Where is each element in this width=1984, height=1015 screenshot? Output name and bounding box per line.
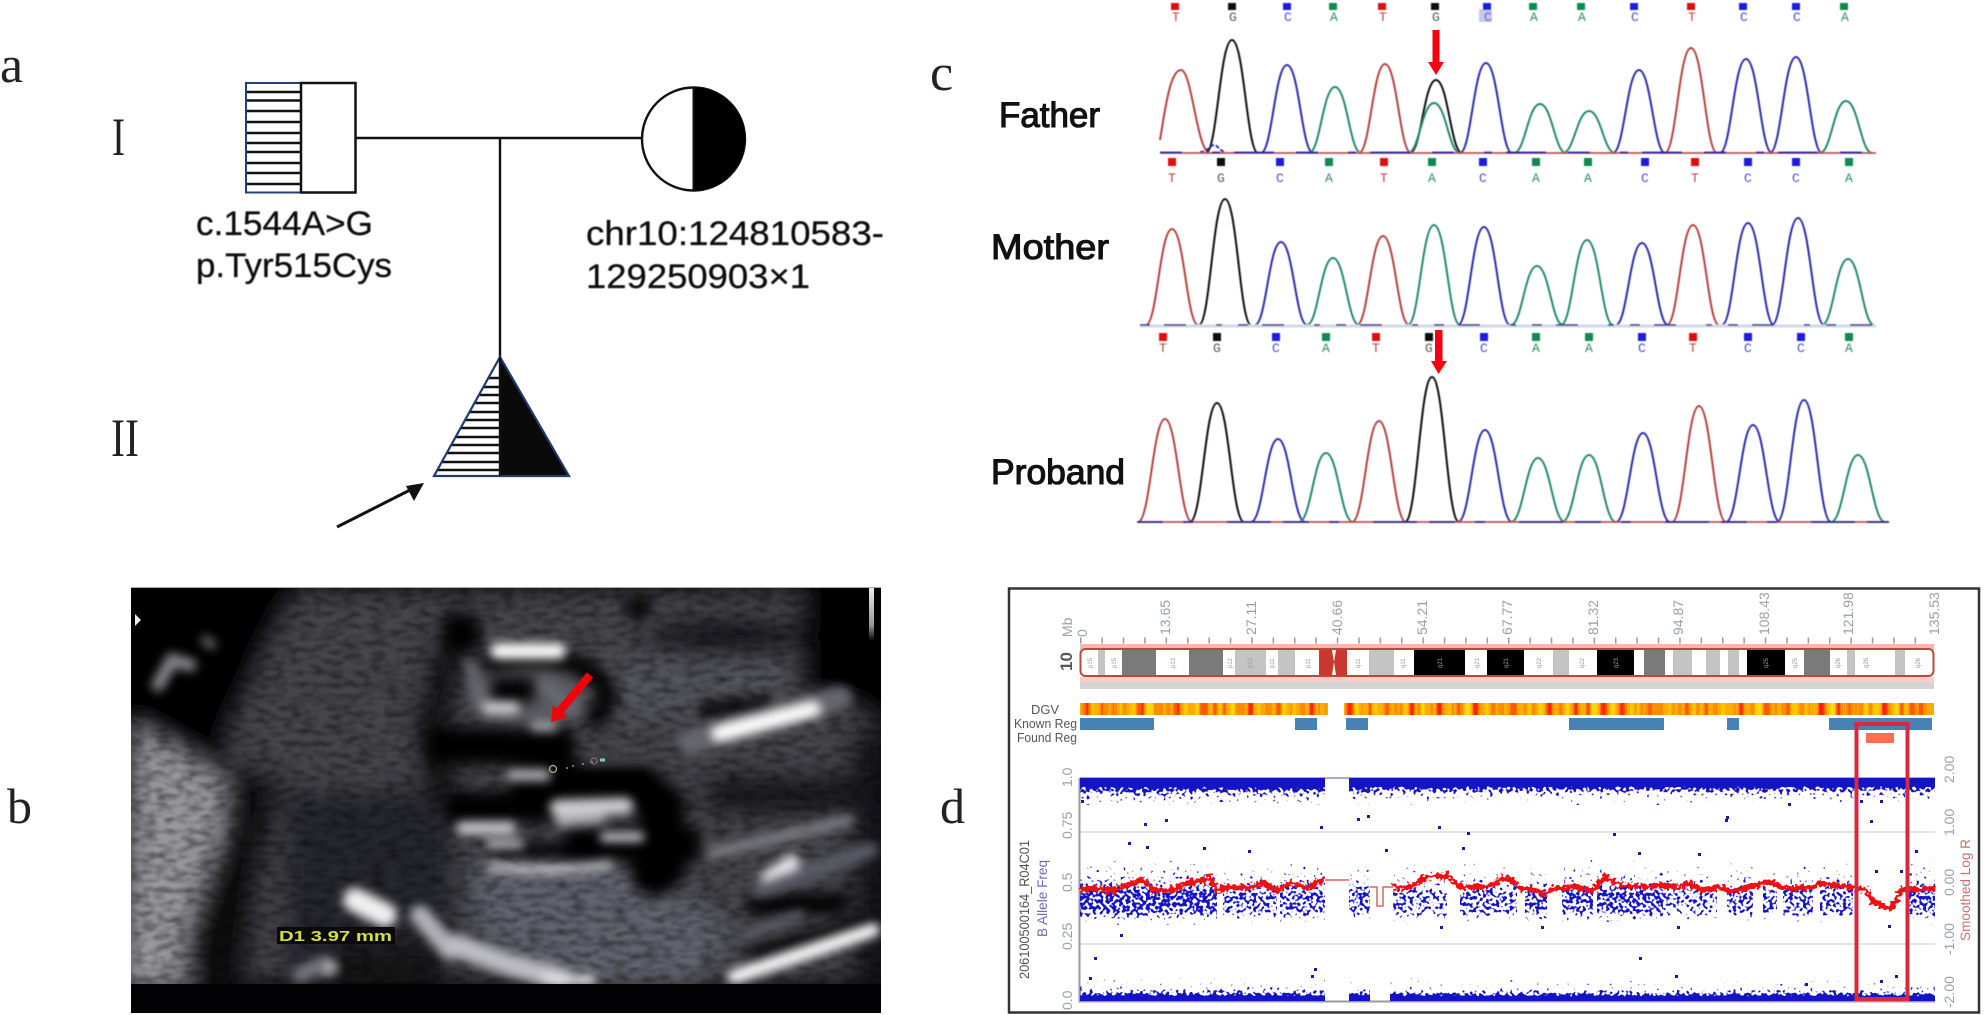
chromosome axis labels: Mb <box>1059 617 1075 637</box>
chromosome 10 ideogram: q26 <box>1864 657 1870 668</box>
Log R axis labels: -1.00 <box>1941 923 1957 955</box>
chromosome 10 ideogram: q21 <box>1438 657 1444 668</box>
BAF axis labels: 1.0 <box>1059 767 1075 787</box>
panel: ultrasound image <box>120 575 895 1013</box>
father variant label: p.Tyr515Cys <box>196 247 392 285</box>
base calls: father top row: TTT <box>1172 10 1696 25</box>
chromosome axis labels: 67.77 <box>1499 600 1515 635</box>
chromosome axis labels: 81.32 <box>1585 600 1601 635</box>
chromosome 10 ideogram: q26 <box>1836 657 1842 668</box>
Log R axis labels: -2.00 <box>1941 976 1957 1008</box>
chromosome 10 ideogram: p13 <box>1171 657 1177 668</box>
smoothed log R line <box>1080 875 1935 909</box>
panel label c: c <box>930 45 953 102</box>
chromosome axis labels: 108.43 <box>1756 592 1772 635</box>
chromosome 10 ideogram: p15 <box>1088 657 1094 668</box>
red arrow on ultrasound <box>551 675 590 722</box>
B allele frequency: middle band <box>1080 855 1935 925</box>
chromosome 10 ideogram: p12 <box>1228 657 1234 668</box>
chromosome axis labels: 13.65 <box>1157 600 1173 635</box>
chromosome 10 ideogram: q22 <box>1580 657 1586 668</box>
panel: sanger chromatograms <box>991 3 1889 522</box>
mother deletion label: chr10:124810583- <box>586 215 884 253</box>
ultrasound tissue background <box>120 575 895 990</box>
generation label II: II <box>111 408 139 468</box>
B allele frequency: upper band <box>1080 778 1935 805</box>
base calls: father top row: GG <box>1229 10 1440 25</box>
scatter plot area <box>1080 724 1935 1002</box>
chromosome axis labels: 94.87 <box>1670 600 1686 635</box>
father variant label: c.1544A>G <box>196 205 373 243</box>
BAF axis labels: 0.0 <box>1059 990 1075 1010</box>
chromosome axis labels: 135.53 <box>1926 592 1942 635</box>
base calls: mother row: TTT <box>1159 341 1697 356</box>
bottom black band <box>131 984 881 1007</box>
base calls: mother row: CCCCC <box>1272 341 1805 356</box>
chromosome ruler ticks <box>1080 638 1934 644</box>
chromosome 10 ideogram <box>1080 644 1934 689</box>
chromosome 10 ideogram: p11 <box>1306 658 1312 668</box>
BAF axis labels: 0.75 <box>1059 812 1075 839</box>
base calls: father top row <box>1171 3 1849 25</box>
chromosome 10 ideogram: p12 <box>1248 657 1254 668</box>
chromosome 10 ideogram: q23 <box>1614 657 1620 668</box>
arrow: proband variant <box>1431 330 1447 374</box>
sample label Proband: Proband <box>991 453 1125 492</box>
B allele frequency: lower band <box>1080 978 1935 1001</box>
DGV heat strip <box>1080 703 1934 715</box>
base calls: father lower row: AAAAA <box>1325 171 1853 186</box>
chromosome 10 ideogram: p15 <box>1112 657 1118 668</box>
ultrasound bright echoes <box>158 640 873 980</box>
sample label Mother: Mother <box>991 228 1109 267</box>
chromosome 10 ideogram: q25 <box>1793 657 1799 668</box>
track labels: Found Reg <box>1017 730 1077 745</box>
base calls: father lower row: CCCCC <box>1276 171 1800 186</box>
bright side stripe <box>869 587 874 641</box>
ultrasound heart ring tissue <box>467 663 587 727</box>
BAF axis labels: B Allele Freq <box>1034 860 1050 937</box>
connecting lines <box>356 138 642 357</box>
known regions <box>1080 718 1932 730</box>
Log R axis labels: 1.00 <box>1941 809 1957 836</box>
panel: pedigree <box>111 83 884 527</box>
mother deletion label: 129250903×1 <box>586 258 810 296</box>
chromosome 10 ideogram: q11 <box>1356 658 1362 668</box>
BAF axis labels: 0.5 <box>1059 872 1075 892</box>
Log R axis labels: 2.00 <box>1941 756 1957 783</box>
track labels <box>1014 702 1077 745</box>
deletion highlight box <box>1856 724 1908 999</box>
proband arrow <box>337 483 424 527</box>
arrow: father variant <box>1428 30 1444 75</box>
BAF axis labels: 0.25 <box>1059 923 1075 950</box>
symbol: mother half-filled circle <box>642 88 745 190</box>
Log R axis labels <box>1941 756 1973 1008</box>
trace: mother <box>1140 199 1876 326</box>
chromosome axis labels: 0 <box>1074 629 1090 637</box>
base calls: mother row <box>1159 333 1853 356</box>
base calls: father lower row <box>1168 158 1853 186</box>
panel label d: d <box>940 778 965 834</box>
ultrasound speckle texture <box>131 587 881 984</box>
Log R axis labels: 0.00 <box>1941 869 1957 896</box>
caliper marker <box>550 758 605 772</box>
chromosome 10 ideogram: q26 <box>1916 657 1922 668</box>
panel: SNP array plot <box>1009 588 1979 1012</box>
mother deletion label <box>586 215 884 296</box>
Log R axis labels: Smoothed Log R <box>1957 839 1973 941</box>
father variant label <box>196 205 392 285</box>
generation label I: I <box>112 107 125 167</box>
chromosome 10 ideogram: q21 <box>1504 657 1510 668</box>
array frame <box>1009 588 1979 1012</box>
chromosome 10 ideogram: p11 <box>1270 658 1276 668</box>
measurement label D1 3.97 mm <box>277 927 395 945</box>
symbol: proband half-hatched half-filled triangle <box>430 357 569 476</box>
base calls: father top row: AAAA <box>1330 10 1849 25</box>
base calls: mother row: AAAA <box>1322 341 1853 356</box>
symbol: father half-hatched square <box>246 83 356 192</box>
BAF axis labels: 206100500164_R04C01 <box>1016 840 1032 979</box>
chromosome axis labels: 121.98 <box>1840 592 1856 635</box>
base calls: father top row: CCCCC <box>1284 10 1801 25</box>
track labels: DGV <box>1031 702 1059 717</box>
scale marker <box>135 614 141 626</box>
chromosome 10 ideogram: q22 <box>1537 657 1543 668</box>
measurement label D1 3.97 mm: D1 3.97 mm <box>279 928 392 945</box>
sample label Father: Father <box>999 96 1100 135</box>
base calls: mother row: GG <box>1213 341 1433 356</box>
chromosome axis labels: 54.21 <box>1414 600 1430 635</box>
chromosome axis labels: 27.11 <box>1243 601 1259 635</box>
panel label b: b <box>7 778 32 834</box>
ultrasound heart chambers <box>428 596 873 955</box>
track labels: Known Reg <box>1014 716 1077 731</box>
found region <box>1866 733 1894 743</box>
chromosome 10 ideogram: q11 <box>1401 658 1407 668</box>
chromosome 10 ideogram: q21 <box>1475 657 1481 668</box>
BAF axis labels <box>1016 767 1075 1010</box>
chromosome axis labels <box>1059 592 1942 637</box>
base calls: father lower row: G <box>1217 171 1225 186</box>
base calls: father lower row: TTT <box>1168 171 1699 186</box>
chromosome 10 ideogram: q25 <box>1764 657 1770 668</box>
trace: father <box>1160 40 1876 153</box>
trace: proband <box>1137 377 1889 522</box>
chromosome axis labels: 40.66 <box>1329 600 1345 635</box>
chromosome number: 10 <box>1057 652 1076 671</box>
scattered outlier points <box>1081 800 1918 986</box>
panel label a: a <box>0 37 23 94</box>
